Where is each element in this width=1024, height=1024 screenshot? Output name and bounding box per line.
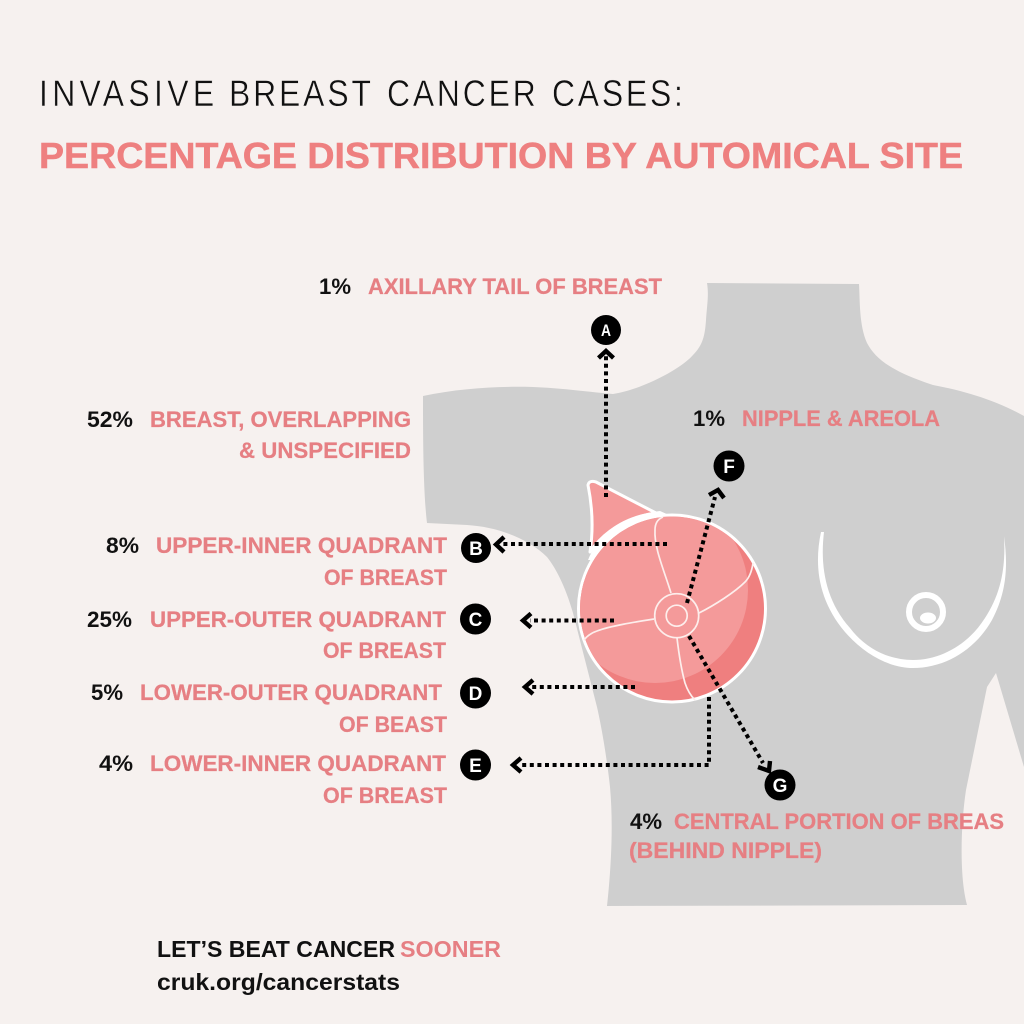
label: upper-outer: OF BREAST <box>323 638 446 663</box>
footer: SOONER <box>400 936 501 962</box>
label: lower-inner: 4% <box>99 751 133 776</box>
label: lower-outer <box>91 680 447 737</box>
label: overlapping <box>87 407 411 463</box>
title: line one <box>39 73 683 115</box>
label: upper-outer: UPPER-OUTER QUADRANT <box>150 607 446 632</box>
label: upper-outer <box>87 607 446 663</box>
badge E: E <box>469 756 482 777</box>
title: line one: CANCER <box>387 73 536 115</box>
footer <box>157 936 501 995</box>
breast diagram <box>577 511 767 704</box>
arrow D <box>525 680 635 694</box>
arrow F <box>687 490 724 603</box>
title: line two: PERCENTAGE DISTRIBUTION BY AUTOMICAL SITE <box>39 135 963 176</box>
arrow C <box>523 614 614 628</box>
label: upper-inner: UPPER-INNER QUADRANT <box>156 533 447 558</box>
footer: LET’S BEAT CANCER <box>157 936 395 962</box>
label: overlapping: 52% <box>87 407 133 432</box>
badge A <box>591 315 621 345</box>
label: axillary tail: AXILLARY TAIL OF BREAST <box>368 274 662 299</box>
badge G: G <box>773 776 787 797</box>
label: nipple and areola: NIPPLE & AREOLA <box>742 406 940 431</box>
label: central portion: (BEHIND NIPPLE) <box>629 838 822 863</box>
label: central portion: CENTRAL PORTION OF BREAS <box>674 809 1004 834</box>
label: axillary tail: 1% <box>319 274 351 299</box>
title: line one: INVASIVE <box>39 73 214 115</box>
label: upper-inner: OF BREAST <box>324 565 447 590</box>
label: lower-outer: LOWER-OUTER QUADRANT <box>140 680 442 705</box>
footer: cruk.org/cancerstats <box>157 969 400 995</box>
label: overlapping: BREAST, OVERLAPPING <box>150 407 411 432</box>
label: upper-outer: 25% <box>87 607 132 632</box>
label: lower-inner <box>99 751 447 808</box>
label: lower-inner: OF BREAST <box>323 783 447 808</box>
title: line one: CASES: <box>552 73 683 115</box>
label: nipple and areola: 1% <box>693 406 725 431</box>
arrow B <box>496 537 667 552</box>
badge D <box>460 678 491 708</box>
label: central portion: 4% <box>630 809 662 834</box>
arrow A <box>598 351 614 497</box>
badge F <box>714 450 744 482</box>
badge G <box>764 770 796 800</box>
arrow G <box>689 636 770 771</box>
title: line one: BREAST <box>229 73 371 115</box>
label: lower-inner: LOWER-INNER QUADRANT <box>150 751 446 776</box>
label: lower-outer: OF BEAST <box>339 712 447 737</box>
badge A: A <box>601 321 611 340</box>
arrow E <box>513 697 709 772</box>
right breast outline <box>818 532 1006 668</box>
badge B <box>461 533 491 563</box>
badge C <box>460 604 491 634</box>
label: lower-outer: 5% <box>91 680 123 705</box>
badge C: C <box>469 610 483 631</box>
badge D: D <box>469 684 482 705</box>
badge E <box>460 750 491 780</box>
label: central portion <box>629 809 1004 863</box>
badge F: F <box>723 457 735 478</box>
label: overlapping: & UNSPECIFIED <box>239 438 411 463</box>
badge B: B <box>469 539 483 560</box>
label: upper-inner: 8% <box>106 533 139 558</box>
axillary tail of breast <box>588 481 656 552</box>
torso silhouette <box>423 283 1024 906</box>
label: upper-inner <box>106 533 447 590</box>
